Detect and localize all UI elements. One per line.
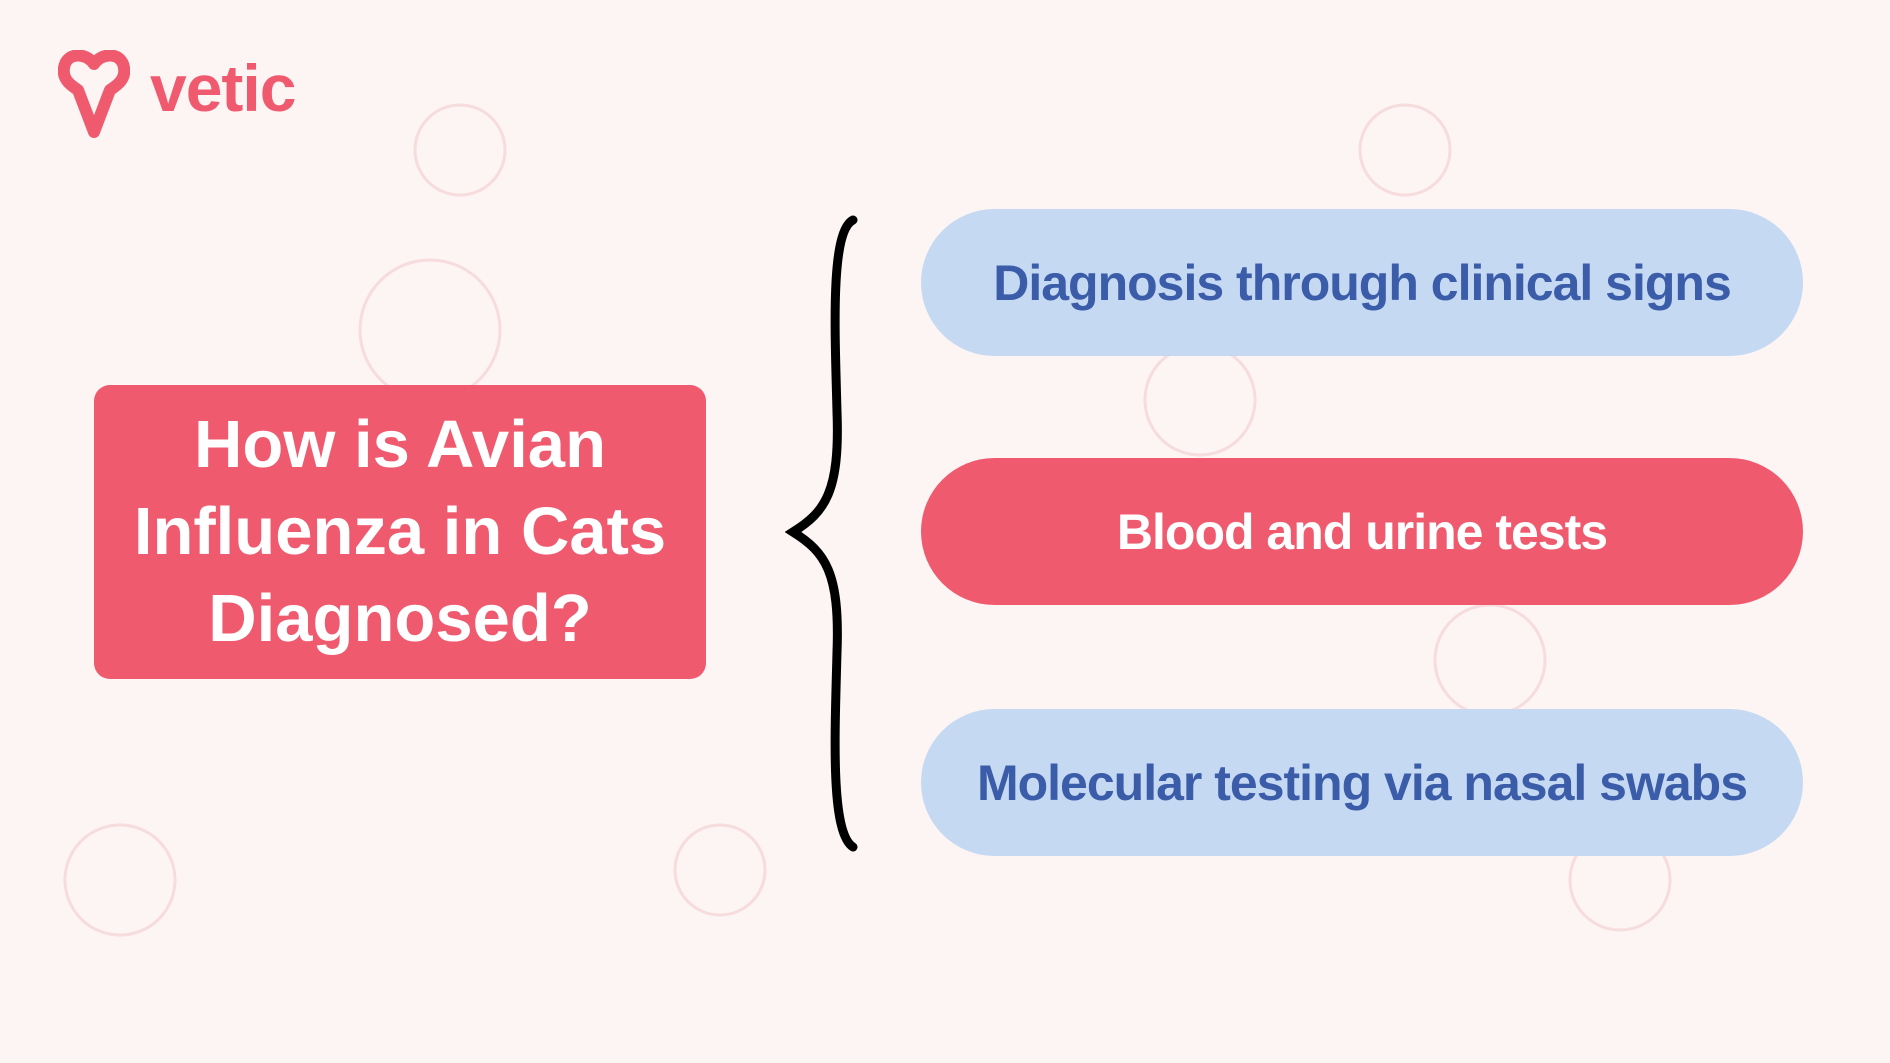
logo — [58, 50, 295, 138]
pill: clinical signs: Diagnosis through clinical signs — [993, 254, 1731, 310]
title box — [94, 385, 706, 679]
pill: blood and urine: Blood and urine tests — [1117, 504, 1607, 560]
curly brace — [785, 216, 858, 852]
logo text: vetic — [150, 51, 295, 125]
pill: blood and urine — [921, 458, 1803, 605]
title box: How is Avian — [194, 407, 606, 482]
title box: Diagnosed? — [208, 581, 592, 656]
title box: Influenza in Cats — [134, 494, 666, 569]
pill: molecular testing: Molecular testing via nasal swabs — [977, 754, 1747, 810]
pill: clinical signs — [921, 209, 1803, 356]
icon: heart V — [58, 50, 130, 138]
pill: molecular testing — [921, 709, 1803, 856]
